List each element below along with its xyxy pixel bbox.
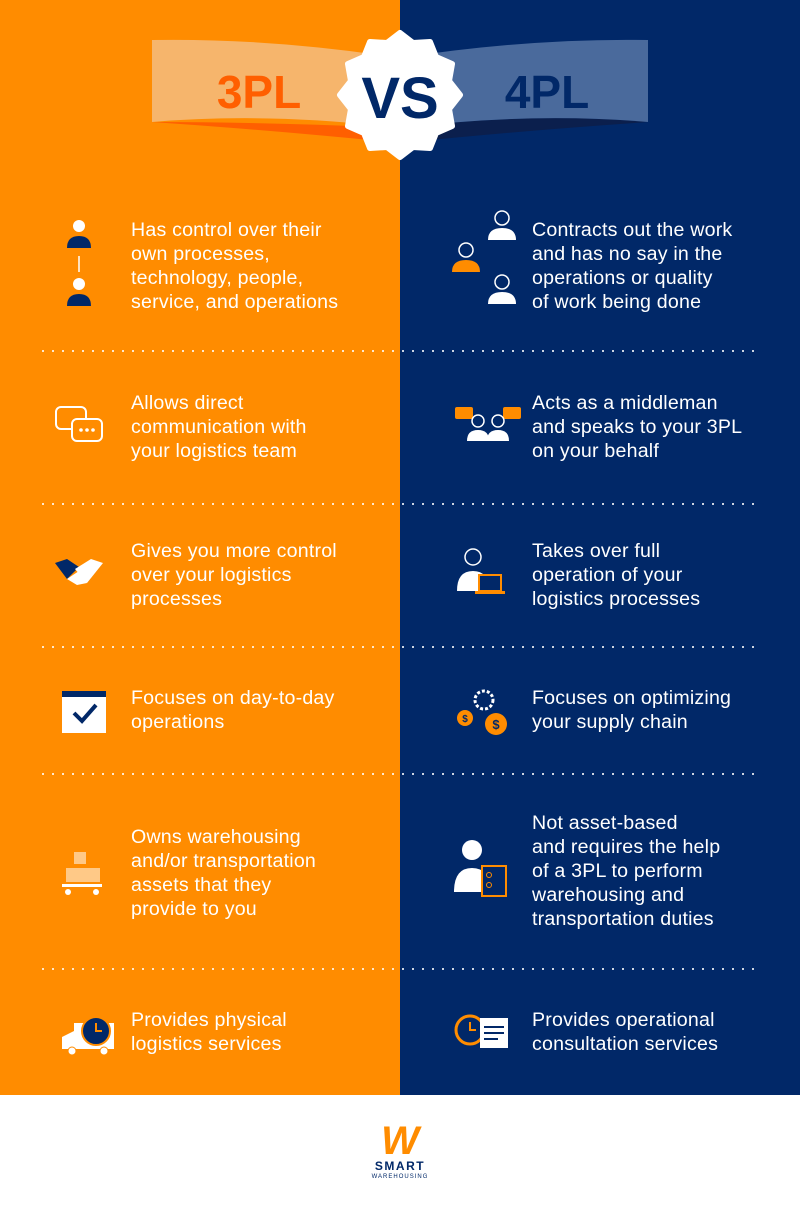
- icon: chat bubbles: [55, 406, 103, 442]
- logo: WAREHOUSING: [372, 1174, 428, 1180]
- text: 3PL row4: operations: [131, 711, 225, 733]
- text: 3PL row2: communication with: [131, 416, 307, 438]
- icon: calendar check: [62, 691, 106, 733]
- title banner: 4PL: [505, 66, 589, 118]
- title banner: 3PL: [217, 66, 301, 118]
- text: 4PL row1: and has no say in the: [532, 243, 722, 265]
- text: 4PL row5: warehousing and: [532, 884, 684, 906]
- text: 3PL row1: service, and operations: [131, 291, 338, 313]
- logo: W: [381, 1119, 419, 1163]
- text: 3PL row5: and/or transportation: [131, 850, 316, 872]
- icon: hand truck: [62, 852, 102, 895]
- text: 4PL row2: and speaks to your 3PL: [532, 416, 742, 438]
- text: 3PL row5: assets that they: [131, 874, 271, 896]
- text: 4PL row6: consultation services: [532, 1033, 718, 1055]
- text: 3PL row3: [131, 540, 337, 610]
- icon: clock document: [454, 1014, 508, 1048]
- text: 4PL row2: on your behalf: [532, 440, 659, 462]
- text: 3PL row1: Has control over their: [131, 219, 322, 241]
- text: 4PL row3: [532, 540, 700, 610]
- text: 4PL row5: of a 3PL to perform: [532, 860, 703, 882]
- text: 4PL row1: operations or quality: [532, 267, 713, 289]
- text: 3PL row6: Provides physical: [131, 1009, 287, 1031]
- text: 3PL row1: technology, people,: [131, 267, 303, 289]
- icon: middleman: [455, 407, 521, 441]
- text: 4PL row1: of work being done: [532, 291, 701, 313]
- text: 4PL row5: and requires the help: [532, 836, 720, 858]
- text: 4PL row3: operation of your: [532, 564, 682, 586]
- text: 3PL row5: [131, 826, 316, 920]
- text: 4PL row6: Provides operational: [532, 1009, 715, 1031]
- icon: handshake: [55, 559, 103, 585]
- icon: gears: $: [492, 717, 500, 732]
- text: 4PL row5: [532, 812, 720, 930]
- text: 4PL row4: Focuses on optimizing: [532, 687, 731, 709]
- title banner: [152, 30, 648, 160]
- text: 4PL row2: [532, 392, 742, 462]
- icon: worker with clipboard: [454, 840, 507, 897]
- text: 3PL row3: processes: [131, 588, 222, 610]
- icon: person with laptop: [457, 548, 505, 594]
- text: 4PL row5: transportation duties: [532, 908, 714, 930]
- text: 4PL row1: [532, 219, 732, 313]
- icon: truck clock: [62, 1018, 114, 1054]
- text: 3PL row6: [131, 1009, 287, 1055]
- logo: [372, 1119, 428, 1180]
- text: 3PL row4: Focuses on day-to-day: [131, 687, 335, 709]
- text: 4PL row3: logistics processes: [532, 588, 700, 610]
- text: 3PL row6: logistics services: [131, 1033, 282, 1055]
- icon: gears: $: [462, 714, 468, 725]
- icon: contracts: [452, 210, 516, 304]
- text: 3PL row3: Gives you more control: [131, 540, 337, 562]
- text: 3PL row3: over your logistics: [131, 564, 292, 586]
- title banner: VS: [361, 66, 439, 131]
- text: 3PL row5: Owns warehousing: [131, 826, 301, 848]
- text: 3PL row2: your logistics team: [131, 440, 297, 462]
- text: 4PL row2: Acts as a middleman: [532, 392, 718, 414]
- text: 4PL row3: Takes over full: [532, 540, 660, 562]
- text: 4PL row4: your supply chain: [532, 711, 688, 733]
- text: 4PL row4: [532, 687, 731, 733]
- icon: people hierarchy: [67, 220, 91, 306]
- text: 4PL row1: Contracts out the work: [532, 219, 732, 241]
- text: 3PL row5: provide to you: [131, 898, 257, 920]
- text: 3PL row2: [131, 392, 307, 462]
- text: 3PL row4: [131, 687, 335, 733]
- text: 3PL row1: [131, 219, 338, 313]
- text: 3PL row1: own processes,: [131, 243, 270, 265]
- text: 4PL row6: [532, 1009, 718, 1055]
- text: 4PL row5: Not asset-based: [532, 812, 678, 834]
- icon: gears: [457, 690, 507, 735]
- logo: SMART: [375, 1159, 425, 1173]
- text: 3PL row2: Allows direct: [131, 392, 244, 414]
